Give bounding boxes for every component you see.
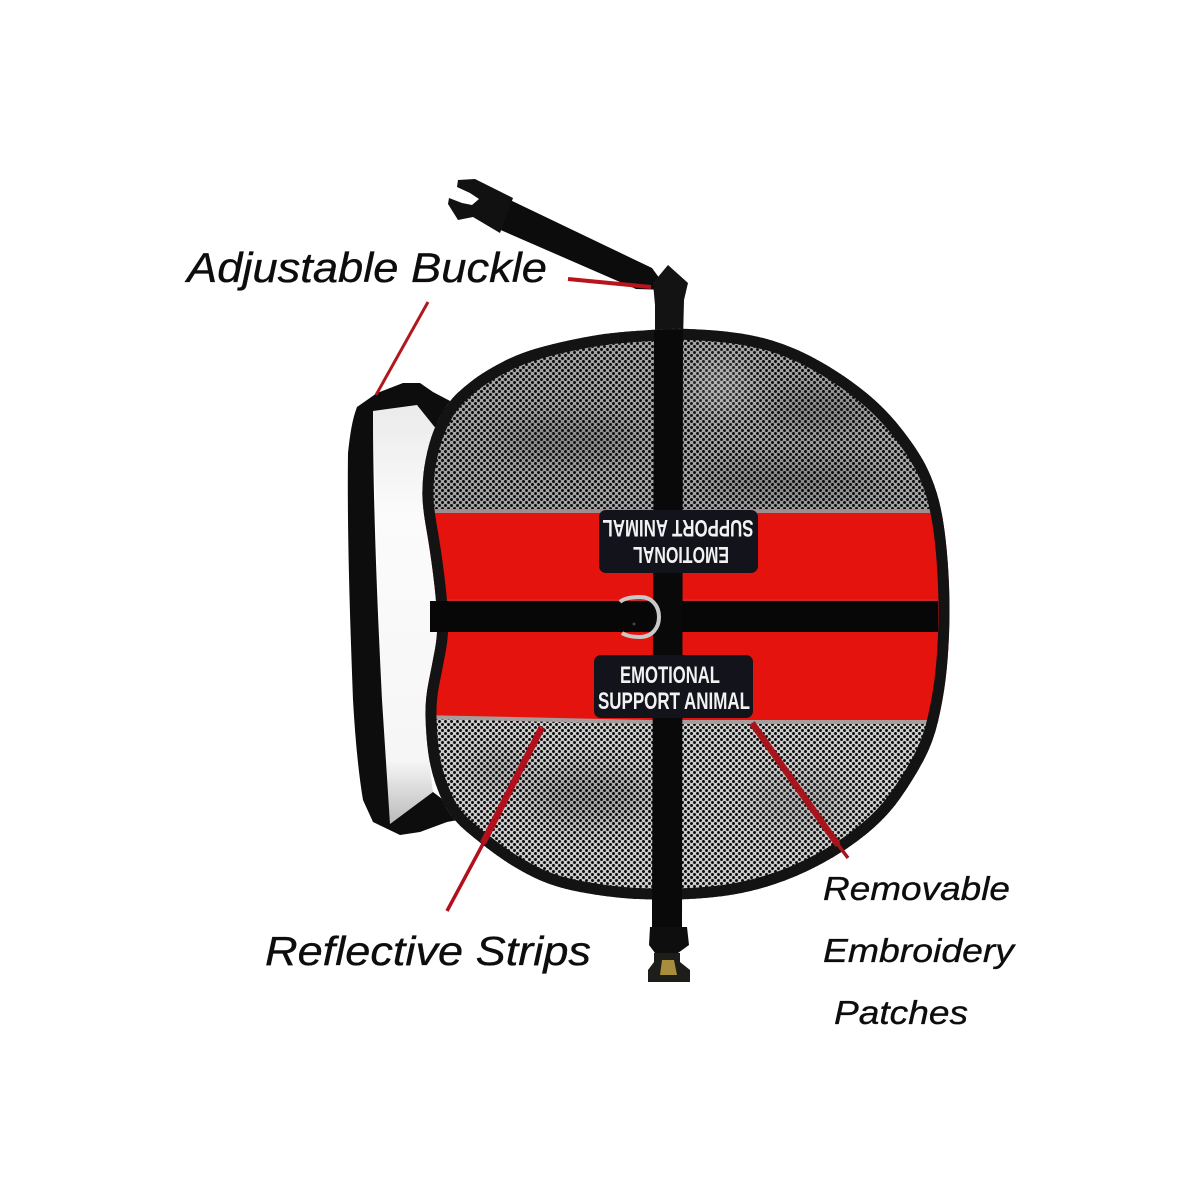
reflective strip bottom	[420, 715, 955, 724]
label: removable embroidery patches: Embroidery	[823, 932, 1017, 969]
patch: emotional support animal: SUPPORT ANIMAL	[598, 688, 750, 715]
label: removable embroidery patches: Patches	[834, 994, 968, 1031]
patch: upside-down emotional support animal: EMOTIONAL	[633, 542, 729, 568]
shaded interior between strap and vest	[373, 405, 442, 824]
mesh body of vest	[420, 320, 955, 910]
vest black rim	[422, 329, 950, 900]
icon: D-ring	[620, 597, 659, 637]
strap: vertical center strap	[652, 330, 683, 925]
callout line: removable patches	[752, 723, 848, 858]
callout line: adjustable buckle left	[376, 302, 428, 395]
label: removable embroidery patches: Removable	[823, 870, 1010, 907]
mesh shading	[470, 355, 880, 826]
callout line: adjustable buckle right	[568, 279, 651, 287]
label: reflective strips: Reflective Strips	[265, 928, 591, 974]
strap: upper adjustable strap with male buckle	[448, 179, 688, 340]
patch: upside-down emotional support animal: SUPPORT ANIMAL	[602, 514, 754, 541]
vest product	[348, 179, 955, 982]
patch: upside-down emotional support animal	[599, 510, 758, 573]
infographic: vest diagram with callouts	[184, 179, 1016, 1024]
red reflective band	[420, 513, 955, 722]
strap: left side strap with buckle	[348, 383, 458, 835]
callout line: reflective strips	[447, 727, 542, 911]
label: removable embroidery patches	[823, 870, 1017, 1031]
patch: emotional support animal: EMOTIONAL	[620, 662, 720, 689]
strap end: lower buckle tag	[648, 896, 690, 982]
patch: emotional support animal	[594, 655, 753, 718]
reflective strip top	[420, 509, 955, 513]
label: adjustable buckle: Adjustable Buckle	[184, 244, 547, 291]
strap: horizontal chest belt	[430, 601, 938, 632]
